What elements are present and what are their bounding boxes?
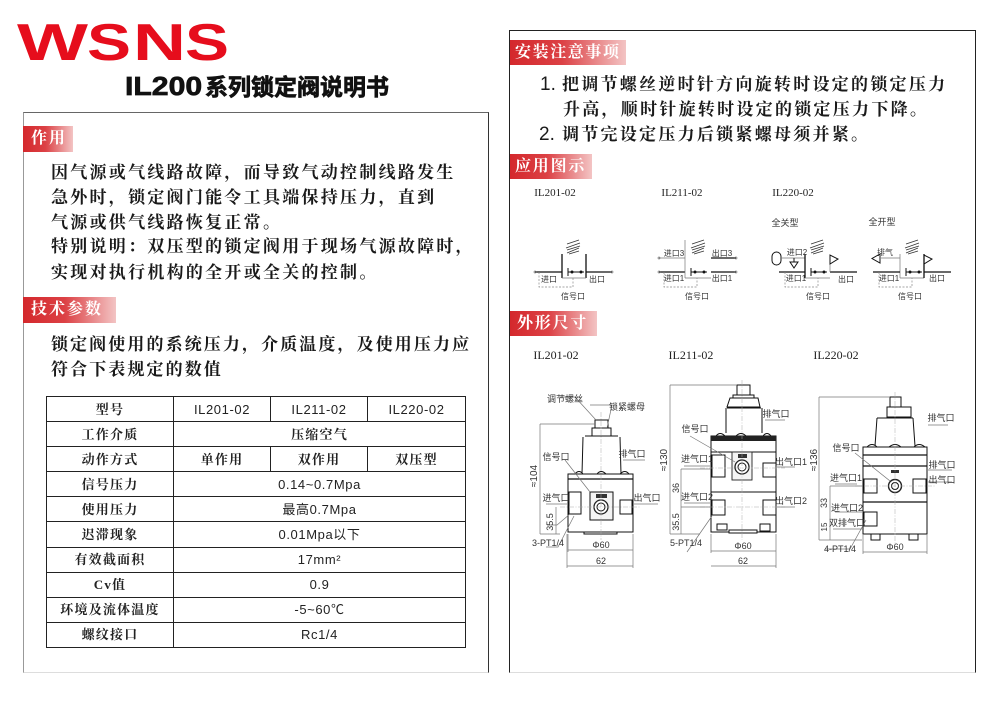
table: technical parameters: 最高0.7Mpa	[282, 502, 357, 517]
text block: installation notes: 1.	[540, 74, 556, 95]
heading: 作用: 作用	[31, 130, 67, 147]
drawing: IL211 outline: 35.5	[671, 513, 681, 531]
text block: table intro: 符合下表规定的数值	[51, 360, 223, 379]
heading: 应用图示	[510, 154, 592, 179]
drawing: IL220 outline: ≈136	[809, 448, 820, 471]
drawing: IL220 outline: 33	[819, 498, 829, 508]
drawing: IL220 outline: 4-PT1/4	[824, 544, 856, 554]
drawing: IL211 outline: 36	[671, 483, 681, 493]
heading: 应用图示: 应用图示	[515, 158, 586, 175]
drawing: IL220 outline	[809, 348, 956, 554]
drawing: IL220 outline: 排气口	[927, 412, 955, 423]
table: technical parameters: 双压型	[395, 452, 438, 467]
drawing: IL211 outline: 进气口1	[681, 453, 713, 464]
text block: function description: 特别说明：双压型的锁定阀用于现场气源故障时，	[51, 237, 475, 256]
text block: table intro	[51, 335, 471, 379]
schematic: IL220-02: 排气	[877, 247, 893, 257]
drawing: IL220 outline: 进气口1	[830, 472, 862, 483]
table: technical parameters: 0.01Mpa以下	[278, 527, 360, 542]
table: technical parameters: 双作用	[298, 452, 340, 467]
table: technical parameters: 迟滞现象	[82, 527, 138, 542]
drawing: IL220 outline: 出气口	[928, 474, 956, 485]
schematic: IL220-02: 全开型	[868, 216, 896, 227]
schematic: IL211-02: 进口1	[664, 274, 685, 283]
drawing: IL201 outline: 62	[596, 556, 606, 566]
drawing: IL201 outline: 进气口	[542, 492, 570, 503]
drawing: IL201 outline: 35.5	[545, 513, 555, 531]
table: technical parameters: 螺纹接口	[82, 627, 138, 642]
schematic: IL201-02: 进口	[541, 275, 557, 284]
drawing: IL220 outline: 排气口	[928, 459, 956, 470]
drawing: IL211 outline: 62	[738, 556, 748, 566]
drawing: IL211 outline: 出气口1	[775, 456, 807, 467]
schematic: IL220-02: 信号口	[806, 291, 830, 301]
table: technical parameters: Rc1/4	[301, 627, 338, 642]
panel: left	[23, 112, 489, 673]
schematic: IL220-02: 出口	[929, 273, 945, 283]
heading: 技术参数	[23, 297, 116, 323]
drawing: IL220 outline: 信号口	[832, 442, 860, 453]
schematic: IL220-02: 全关型	[771, 217, 799, 228]
drawing: IL201 outline: 锁紧螺母	[609, 401, 645, 412]
table: technical parameters: 环境及流体温度	[60, 602, 160, 617]
schematic: IL220-02: 进口2	[787, 248, 808, 257]
drawing: IL220 outline: IL220-02	[813, 348, 859, 362]
text block: function description	[51, 163, 475, 282]
schematic: IL201-02: IL201-02	[534, 187, 576, 199]
text block: installation notes: 2.	[539, 124, 555, 145]
heading: 外形尺寸	[510, 311, 597, 336]
text block: table intro: 锁定阀使用的系统压力，介质温度，及使用压力应	[51, 335, 471, 354]
table: technical parameters	[46, 396, 466, 648]
drawing: IL201 outline: 3-PT1/4	[532, 538, 564, 548]
heading: 安装注意事项	[510, 40, 626, 65]
schematic: IL211-02: 出口1	[712, 273, 733, 283]
schematic: IL220-02: IL220-02	[772, 187, 814, 199]
drawing: IL220 outline: Φ60	[886, 542, 904, 552]
drawing: IL201 outline: ≈104	[529, 464, 540, 487]
drawing: IL211 outline: Φ60	[734, 541, 752, 551]
text block: function description: 因气源或气线路故障，而导致气动控制线路发生	[51, 163, 456, 182]
drawing: IL211 outline	[659, 348, 807, 568]
drawing: IL201 outline: Φ60	[592, 540, 610, 550]
heading: 外形尺寸: 外形尺寸	[517, 315, 588, 332]
drawing: IL220 outline: 双排气口	[829, 517, 865, 528]
schematic: IL201-02	[534, 187, 613, 301]
drawing: IL201 outline: 排气口	[618, 448, 646, 459]
table: technical parameters: 信号压力	[82, 477, 138, 492]
table: technical parameters: 17mm²	[298, 552, 341, 567]
drawing: IL211 outline: 出气口2	[775, 495, 807, 506]
title: 系列锁定阀说明书	[205, 74, 389, 100]
table: technical parameters: 型号	[96, 402, 124, 417]
schematic: IL211-02: 信号口	[685, 291, 709, 301]
drawing: IL211 outline: IL211-02	[669, 348, 713, 362]
drawing: IL211 outline: 进气口2	[681, 491, 713, 502]
table: technical parameters: 压缩空气	[291, 427, 348, 442]
heading: 技术参数: 技术参数	[31, 301, 103, 318]
schematic: IL201-02: 出口	[589, 274, 605, 284]
panel: right	[509, 30, 976, 673]
schematic: IL220-02	[771, 187, 951, 301]
drawing: IL211 outline: 排气口	[762, 408, 790, 419]
drawing: IL220 outline: 15	[820, 522, 829, 531]
drawing: IL211 outline: 信号口	[681, 423, 709, 434]
drawing: IL201 outline: 调节螺丝	[547, 393, 583, 404]
text block: function description: 急外时，锁定阀门能令工具端保持压力，直到	[51, 188, 436, 207]
table: technical parameters: IL211-02	[291, 402, 347, 417]
logo: WSNS	[17, 14, 229, 70]
table: technical parameters: 单作用	[201, 452, 243, 467]
table: technical parameters: 0.14~0.7Mpa	[278, 477, 361, 492]
text block: installation notes: 把调节螺丝逆时针方向旋转时设定的锁定压力	[562, 75, 947, 94]
text block: installation notes: 调节完设定压力后锁紧螺母须并紧。	[562, 125, 870, 144]
heading: 安装注意事项: 安装注意事项	[515, 44, 621, 61]
schematic: IL220-02: 出口	[838, 274, 854, 284]
table: technical parameters: 动作方式	[82, 452, 138, 467]
drawing: IL220 outline: 进气口2	[831, 502, 863, 513]
drawing: IL201 outline: 出气口	[633, 492, 661, 503]
text block: installation notes	[539, 74, 947, 145]
schematic: IL211-02: IL211-02	[661, 187, 703, 199]
drawing: IL201 outline: 信号口	[542, 451, 570, 462]
table: technical parameters: -5~60℃	[294, 602, 345, 617]
text block: installation notes: 升高，顺时针旋转时设定的锁定压力下降。	[563, 100, 929, 119]
table: technical parameters: IL220-02	[388, 402, 445, 417]
heading: 作用	[23, 126, 73, 152]
drawing: IL201 outline	[529, 348, 661, 568]
schematic: IL220-02: 信号口	[898, 291, 922, 301]
title: IL200	[125, 71, 202, 101]
drawing: IL211 outline: 5-PT1/4	[670, 538, 702, 548]
drawing: IL211 outline: ≈130	[659, 448, 670, 471]
table: technical parameters: 0.9	[310, 577, 329, 592]
table: technical parameters: 工作介质	[82, 427, 138, 442]
table: technical parameters: 有效截面积	[74, 552, 146, 567]
schematic: IL220-02: 进口1	[879, 274, 900, 283]
drawing: IL201 outline: IL201-02	[533, 348, 579, 362]
schematic: IL211-02	[658, 187, 737, 301]
schematic: IL201-02: 信号口	[561, 291, 585, 301]
text block: function description: 实现对执行机构的全开或全关的控制。	[51, 263, 379, 282]
text block: function description: 气源或供气线路恢复正常。	[51, 213, 282, 232]
title	[125, 71, 389, 101]
schematic: IL211-02: 进口3	[664, 249, 685, 258]
table: technical parameters: 使用压力	[82, 502, 138, 517]
table: technical parameters: Cv值	[94, 577, 126, 592]
schematic: IL220-02: 进口1	[786, 274, 807, 283]
table: technical parameters: IL201-02	[194, 402, 250, 417]
schematic: IL211-02: 出口3	[712, 248, 733, 258]
